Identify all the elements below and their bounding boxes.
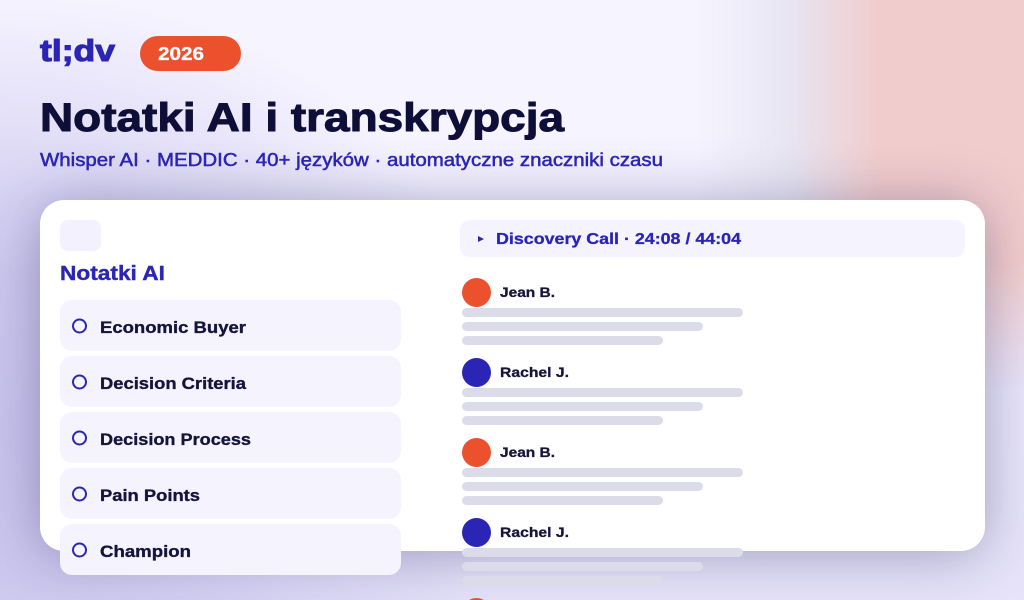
logo: tl;dv: tl;dv (40, 33, 116, 68)
badge: 2026 (140, 36, 241, 71)
item: Decision Criteria (60, 356, 401, 407)
message: Jean B.: Jean B. (500, 444, 555, 460)
peach glow top right (748, 0, 1024, 369)
item: Decision Process: Decision Process (100, 430, 251, 449)
heading: Notatki AI: Notatki AI (60, 263, 165, 285)
panel: main card (40, 200, 985, 551)
item: Champion: Champion (100, 542, 191, 561)
badge: 2026: 2026 (158, 44, 204, 64)
item: Decision Process (60, 412, 401, 463)
message: Jean B.: Jean B. (500, 284, 555, 300)
message: Jean B. (462, 278, 743, 345)
item: Economic Buyer (60, 300, 401, 351)
message: Jean B. (462, 438, 743, 505)
panel: notes column (60, 220, 401, 575)
panel: call transcript (460, 220, 965, 600)
item: Economic Buyer: Economic Buyer (100, 318, 246, 337)
item: Pain Points: Pain Points (100, 486, 200, 505)
item: Pain Points (60, 468, 401, 519)
call header bar (460, 220, 965, 257)
message: Rachel J. (462, 358, 743, 425)
icon: empty notes tile (60, 220, 101, 251)
item: Decision Criteria: Decision Criteria (100, 374, 247, 393)
message: Rachel J.: Rachel J. (500, 364, 569, 380)
subtitle: Whisper AI · MEDDIC · 40+ języków · automatyczne znaczniki czasu (40, 150, 663, 170)
message: Rachel J.: Rachel J. (500, 524, 569, 540)
title: Notatki AI i transkrypcja (40, 96, 565, 140)
call header bar: Discovery Call · 24:08 / 44:04 (496, 231, 741, 248)
message avatar: cut off at bottom (469, 598, 484, 600)
message: Rachel J. (462, 518, 743, 585)
item: Champion (60, 524, 401, 575)
